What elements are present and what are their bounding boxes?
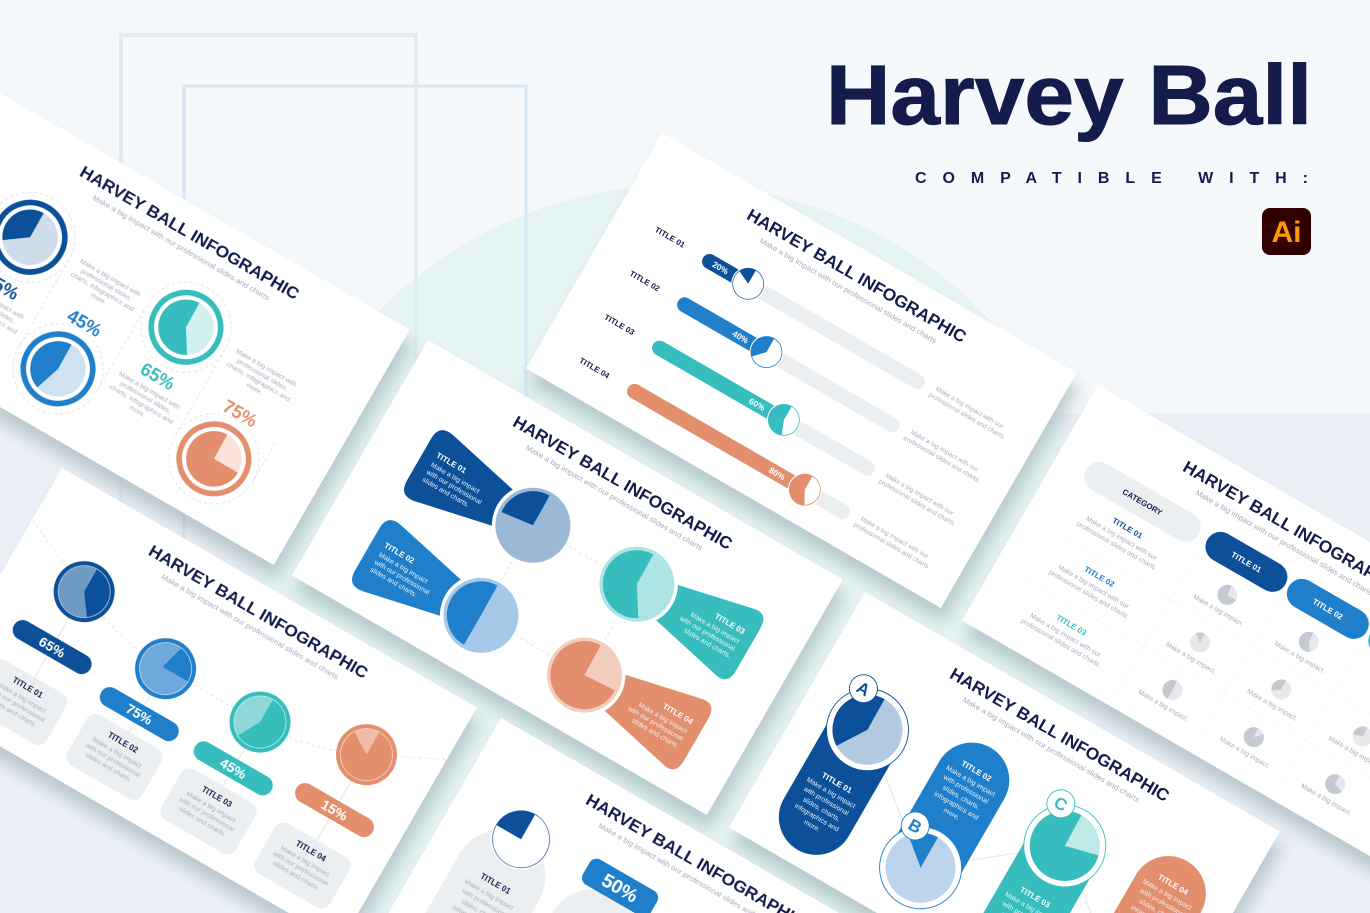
card title 02 with 50% tag: 50% xyxy=(598,870,641,908)
description texts: charts, infographics and xyxy=(108,384,174,426)
subheading: Make a big impact with our professional slides and charts xyxy=(758,236,938,345)
cone title 02: TITLE 02 xyxy=(383,541,416,566)
cone title 03: TITLE 03 xyxy=(713,612,747,636)
vertical connectors xyxy=(20,592,366,865)
card title 02: slides and charts. xyxy=(84,752,133,784)
bar descriptions: professional slides and charts. xyxy=(852,521,932,571)
panel: ring Harvey balls slide xyxy=(0,90,410,565)
description texts: more. xyxy=(128,404,147,419)
card title 01: TITLE 01 xyxy=(479,872,512,896)
bar row 2 xyxy=(670,286,907,443)
cone title 02: slides and charts. xyxy=(369,566,418,599)
row titles: TITLE 04 xyxy=(578,356,612,381)
column header 03 xyxy=(1363,620,1370,691)
cell dividers xyxy=(996,482,1370,850)
capsule A: slides, charts, xyxy=(801,796,841,823)
heading: HARVEY BALL INFOGRAPHIC xyxy=(947,664,1173,806)
row labels: Make a big impact with our xyxy=(1084,515,1159,562)
description texts: professional slides, xyxy=(235,358,289,393)
subheading: Make a big impact with our professional slides and charts xyxy=(1194,488,1370,597)
bar row 4 xyxy=(620,373,857,530)
table cell captions: Make a big impact. xyxy=(1273,641,1326,675)
bar row 1: 20% xyxy=(711,259,731,277)
ball 65% xyxy=(139,280,233,375)
card title 03: Make a big impact xyxy=(185,791,236,824)
capsule D: TITLE 04 xyxy=(1156,872,1190,897)
cone title 03: Make a big impact xyxy=(689,612,740,645)
capsule B: more. xyxy=(942,807,961,822)
bar row 1 xyxy=(695,243,932,400)
table cell captions: Make a big impact. xyxy=(1137,689,1190,723)
pill 65% xyxy=(9,616,95,678)
card title 02 xyxy=(63,710,166,804)
capsule A: more. xyxy=(802,819,821,834)
card title 03: with our professional xyxy=(177,796,236,834)
panel: progress bars slide xyxy=(526,133,1077,608)
card title 04: slides and charts. xyxy=(272,860,321,893)
cone title 02: with our professional xyxy=(372,559,431,597)
row labels: professional slides and charts. xyxy=(1075,521,1158,572)
bar row 4: 80% xyxy=(767,465,787,482)
table cell captions: Make a big impact. xyxy=(1192,594,1245,628)
ball 45% xyxy=(11,321,105,416)
ball 15% xyxy=(325,713,408,796)
bar descriptions: Make a big impact with our xyxy=(859,516,930,561)
cone title 01: TITLE 01 xyxy=(435,451,468,476)
card title 04: with our professional xyxy=(271,850,330,888)
subheading: Make a big impact with our professional slides and charts xyxy=(524,443,704,552)
row labels: TITLE 02 xyxy=(1083,565,1116,589)
row labels: TITLE 01 xyxy=(1111,516,1144,541)
pill 15%: 15% xyxy=(318,796,351,824)
category header xyxy=(1079,456,1206,547)
panel: comparison table slide xyxy=(962,385,1370,860)
row labels: TITLE 03 xyxy=(1055,613,1088,638)
capsule A xyxy=(762,668,927,871)
description texts: charts, infographics and xyxy=(225,361,291,403)
panel: bow shapes slide xyxy=(292,340,843,815)
cone title 02: Make a big impact xyxy=(377,552,429,585)
row labels: Make a big impact with our xyxy=(1028,612,1103,659)
pill 45%: 45% xyxy=(217,754,250,783)
dashed connectors xyxy=(481,525,636,675)
bar descriptions: Make a big impact with our xyxy=(884,472,955,517)
ball 35% xyxy=(0,190,77,285)
ball 65% xyxy=(42,550,126,633)
card title 03 xyxy=(157,765,260,858)
description texts: Make a big impact with xyxy=(234,348,298,389)
row labels: Make a big impact with our xyxy=(1056,564,1131,611)
capsule A: TITLE 01 xyxy=(820,771,854,795)
capsule D xyxy=(1071,842,1220,913)
subheading: Make a big impact with our professional slides and charts xyxy=(961,695,1141,804)
column header 02: TITLE 02 xyxy=(1311,597,1345,622)
ball 4 xyxy=(528,619,640,731)
card title 02 with 50% tag xyxy=(488,852,667,913)
icon: Adobe Illustrator xyxy=(1262,208,1311,255)
description texts: charts, infographics and xyxy=(69,271,135,313)
cone title 04: slides and charts. xyxy=(630,718,680,750)
row titles: TITLE 03 xyxy=(603,313,637,337)
panel: bottom cards slide xyxy=(365,718,916,913)
pill 65%: 65% xyxy=(36,633,69,661)
cone title 02 xyxy=(348,516,473,633)
capsule B: infographics and xyxy=(933,791,980,822)
capsule A: infographics and xyxy=(793,803,840,834)
capsule C: C xyxy=(1051,793,1071,816)
cone title 03 xyxy=(645,567,767,683)
card title 02: TITLE 02 xyxy=(106,730,140,755)
subheading: Make a big impact with our professional slides and charts xyxy=(91,193,271,302)
bar descriptions: professional slides and charts. xyxy=(927,392,1007,441)
heading: HARVEY BALL INFOGRAPHIC xyxy=(145,541,371,683)
heading: HARVEY BALL INFOGRAPHIC xyxy=(744,205,970,347)
bar descriptions: Make a big impact with our xyxy=(934,386,1005,431)
capsule D: Make a big impact xyxy=(1141,878,1193,912)
table cell captions: Make a big impact. xyxy=(1164,641,1217,676)
card title 03: slides and charts. xyxy=(178,806,227,838)
ball 1 xyxy=(477,469,589,581)
cone title 04: Make a big impact xyxy=(637,702,688,735)
description texts xyxy=(0,212,299,478)
table cell captions xyxy=(1137,594,1370,817)
cone title 03: slides and charts. xyxy=(682,627,732,660)
panel: timeline slide xyxy=(0,468,477,913)
cone title 04 xyxy=(593,658,715,773)
percent labels: 45% xyxy=(64,306,105,341)
bar descriptions: professional slides and charts. xyxy=(902,435,982,485)
bar descriptions: professional slides and charts. xyxy=(877,478,957,528)
cone title 01: Make a big impact xyxy=(429,462,481,495)
bar descriptions xyxy=(852,384,1011,571)
connector lines xyxy=(821,730,1164,913)
capsule B: B xyxy=(905,815,925,838)
card title 02: Make a big impact xyxy=(91,736,143,770)
percent labels: 75% xyxy=(219,396,260,432)
card title 04: Make a big impact xyxy=(279,845,330,878)
heading: HARVEY BALL INFOGRAPHIC xyxy=(77,162,303,304)
table cell captions: Make a big impact. xyxy=(1300,783,1353,817)
ball 75% xyxy=(124,627,207,710)
bar row 2: 40% xyxy=(731,328,751,346)
column header 02 xyxy=(1281,573,1370,644)
bar row 3: 60% xyxy=(747,396,767,413)
panel: capsule slide xyxy=(729,592,1280,913)
category header: CATEGORY xyxy=(1121,487,1164,518)
dashed connector xyxy=(2,520,447,813)
column header 01: TITLE 01 xyxy=(1229,550,1263,575)
capsule A: A xyxy=(853,678,873,700)
row labels: professional slides and charts. xyxy=(1019,618,1102,669)
description texts: Make a big impact with xyxy=(118,371,181,411)
column header 01 xyxy=(1200,526,1293,597)
table cell captions: Make a big impact. xyxy=(1246,688,1299,723)
bar descriptions: Make a big impact with our xyxy=(909,429,980,474)
ball 2 xyxy=(425,559,537,671)
capsule A: with professional xyxy=(801,785,850,818)
card title 04 xyxy=(251,819,354,912)
subheading: Make a big impact with our professional slides and charts xyxy=(160,572,340,681)
capsule B: TITLE 02 xyxy=(960,759,993,784)
capsule A: Make a big impact xyxy=(805,777,856,810)
table cell captions: Make a big impact. xyxy=(1218,736,1271,770)
card title 01 xyxy=(393,790,576,913)
dashed connector path xyxy=(0,176,325,520)
cone title 01 xyxy=(400,426,525,543)
card title 01: TITLE 01 xyxy=(11,675,45,700)
capsule B: slides, charts, xyxy=(941,785,981,811)
compatible with label: COMPATIBLE WITH: xyxy=(915,170,1308,187)
capsule B: Make a big impact xyxy=(945,765,996,798)
percent labels xyxy=(0,261,261,439)
ball 45% xyxy=(218,680,302,764)
cone title 04: with our professional xyxy=(626,705,684,743)
card title 01: Make a big impact xyxy=(463,878,515,912)
row titles xyxy=(578,225,687,381)
table balls xyxy=(1159,581,1370,798)
capsule C: TITLE 03 xyxy=(1018,885,1052,910)
icon: Adobe Illustrator: Ai xyxy=(1272,216,1302,249)
main title: Harvey Ball xyxy=(826,48,1312,142)
card title 02: with our professional xyxy=(83,741,142,779)
row labels xyxy=(1019,502,1169,669)
capsule B xyxy=(865,727,1026,913)
cone title 03: with our professional xyxy=(678,615,736,653)
card title 01 xyxy=(0,655,71,749)
row labels: professional slides and charts. xyxy=(1047,569,1130,621)
cone title 01: slides and charts. xyxy=(421,476,470,509)
bar row 3 xyxy=(645,330,882,487)
pill 75%: 75% xyxy=(123,700,156,728)
capsule B: with professional xyxy=(941,774,990,806)
card title 03: TITLE 03 xyxy=(200,785,234,809)
description texts: more. xyxy=(245,382,264,397)
description texts: professional slides, xyxy=(79,268,133,303)
description texts: more. xyxy=(89,292,108,307)
pill 15% xyxy=(291,779,378,841)
capsule C xyxy=(961,783,1125,913)
row titles: TITLE 02 xyxy=(628,269,662,294)
row titles: TITLE 01 xyxy=(653,225,687,250)
ball 75% xyxy=(166,411,261,506)
description texts: professional slides, xyxy=(118,380,172,415)
ball 3 xyxy=(581,528,693,640)
percent labels: 65% xyxy=(137,359,178,394)
heading: HARVEY BALL INFOGRAPHIC xyxy=(510,412,736,554)
cone title 01: with our professional xyxy=(424,469,483,507)
pill 45% xyxy=(190,738,276,799)
pill 75% xyxy=(96,683,182,745)
description texts: Make a big impact with xyxy=(79,258,142,299)
card title 04: TITLE 04 xyxy=(294,839,328,864)
cone title 04: TITLE 04 xyxy=(661,702,695,727)
